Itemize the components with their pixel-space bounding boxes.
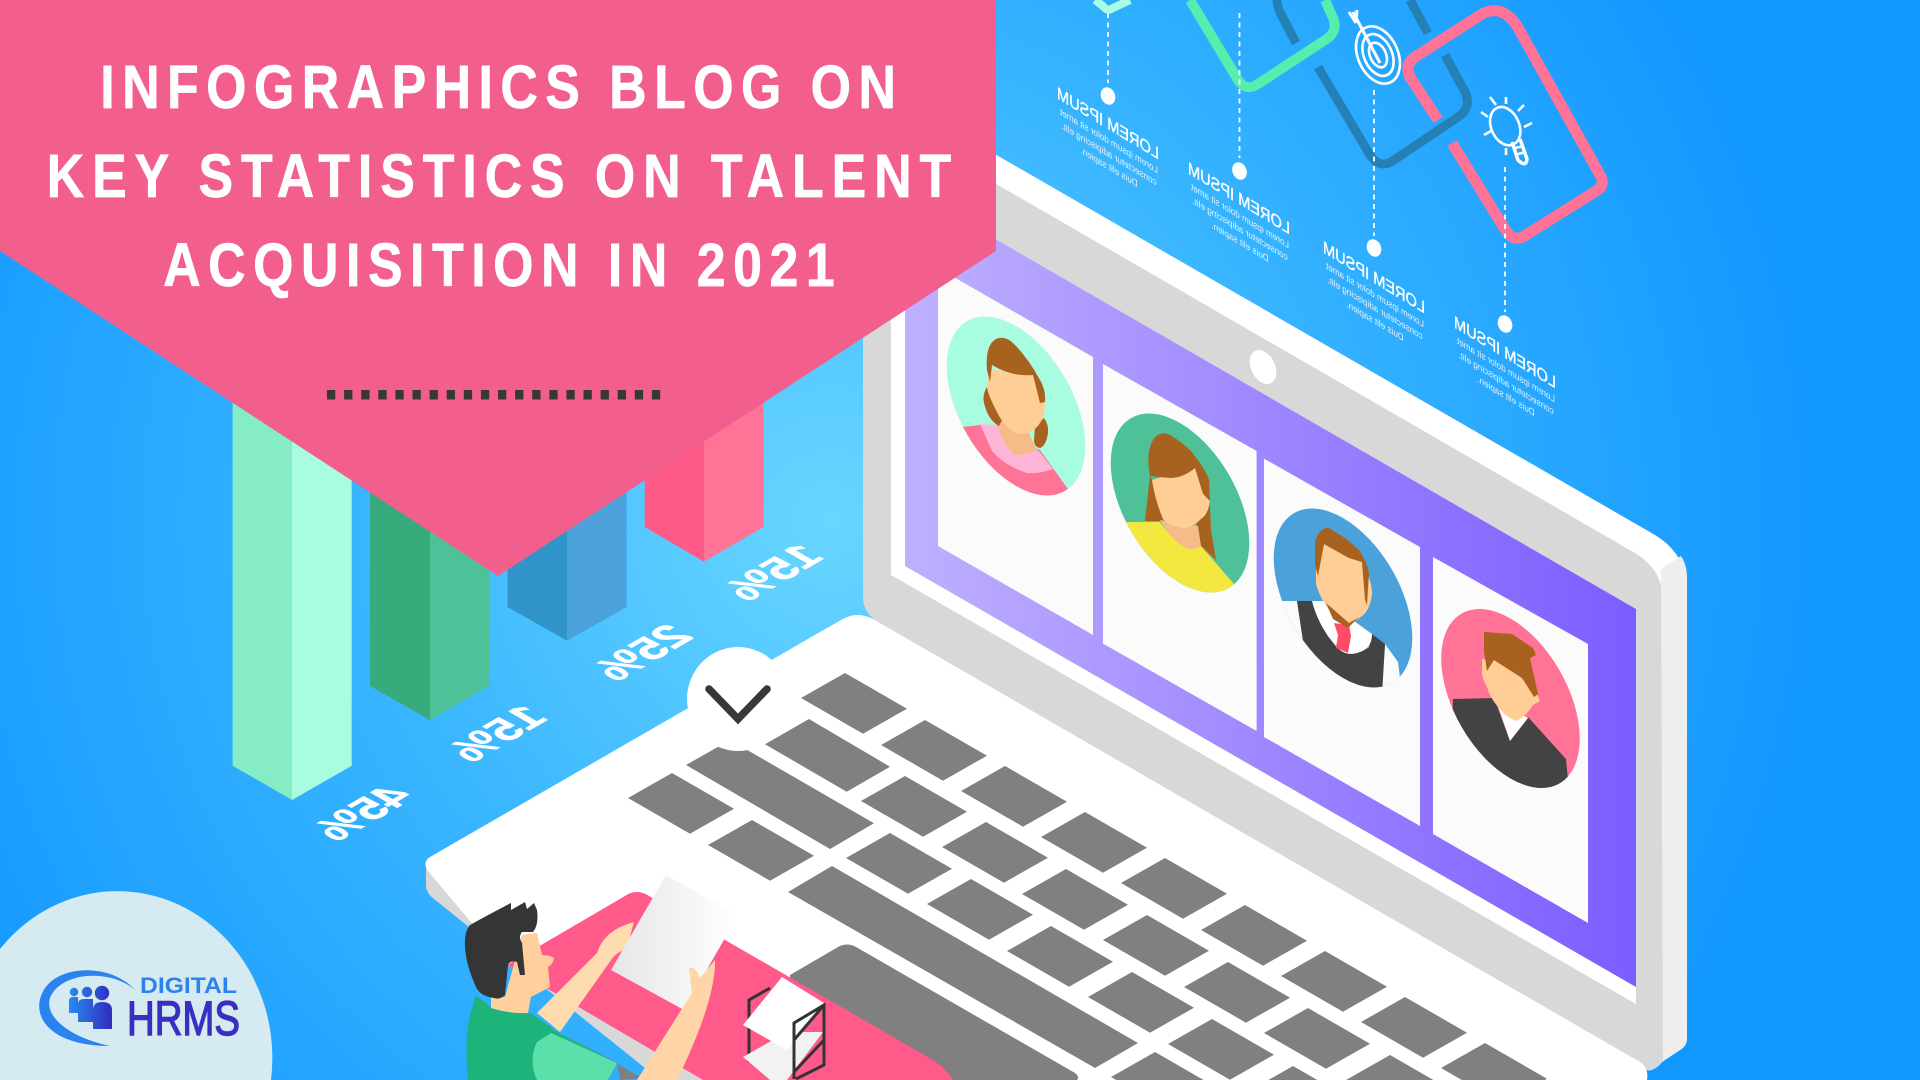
hair xyxy=(465,902,538,999)
profile card 1 xyxy=(938,278,1093,635)
text block: lorem ipsum 1: LOREM IPSUM xyxy=(1057,83,1159,164)
front arm xyxy=(637,960,715,1080)
value labels: 25% xyxy=(582,617,704,688)
face and neck xyxy=(491,933,554,1013)
text block: lorem ipsum 1: Duis elit sapien. xyxy=(1080,145,1138,190)
title: ACQUISITION IN 2021 xyxy=(163,231,835,299)
keyboard keys xyxy=(628,673,1547,1080)
laptop deck side edge xyxy=(426,868,703,1080)
value labels: 45% xyxy=(302,777,424,848)
paper xyxy=(611,875,738,1010)
bar chart xyxy=(233,330,764,800)
text block: lorem ipsum 3: consectetur adipiscing elit. xyxy=(1327,274,1423,343)
person holding paper xyxy=(465,875,738,1080)
logo: digital hrms: HRMS xyxy=(127,993,240,1046)
text block: lorem ipsum 3: Lorem ipsum dolor sit amet xyxy=(1326,260,1424,330)
text block: lorem ipsum 4: consectetur adipiscing elit. xyxy=(1458,349,1554,418)
text block: lorem ipsum 1: consectetur adipiscing elit. xyxy=(1061,120,1157,189)
pink title banner xyxy=(0,0,996,576)
laptop keyboard deck xyxy=(425,615,1647,1080)
text block: lorem ipsum 3: Duis elit sapien. xyxy=(1346,299,1404,344)
chain of four linked rounded frames xyxy=(1095,0,1602,238)
logo badge circle xyxy=(0,891,272,1080)
logo wordmark: DIGITAL xyxy=(140,973,237,998)
back arm xyxy=(537,922,643,1032)
logo people xyxy=(69,986,112,1029)
laptop lid xyxy=(863,78,1687,1070)
profile card 4 xyxy=(1433,557,1588,923)
sleeve xyxy=(532,1033,617,1080)
logo swoosh xyxy=(39,970,135,1046)
text block: lorem ipsum 2: LOREM IPSUM xyxy=(1188,158,1290,239)
icon: light bulb xyxy=(1481,97,1532,164)
value labels: 15% xyxy=(713,537,835,608)
title: KEY STATISTICS ON TALENT xyxy=(47,142,951,210)
pink mat on deck xyxy=(507,892,953,1080)
profile card 3 xyxy=(1264,459,1420,826)
webcam xyxy=(1244,346,1282,388)
bar: 25% xyxy=(508,380,626,641)
title: INFOGRAPHICS BLOG ON xyxy=(100,53,896,121)
chevron badge xyxy=(687,647,789,751)
text block: lorem ipsum 4: Duis elit sapien. xyxy=(1477,374,1535,419)
dashed connectors and dots xyxy=(1098,13,1515,335)
text block: lorem ipsum 4: Lorem ipsum dolor sit amet xyxy=(1457,335,1555,405)
profile card 2 xyxy=(1100,364,1260,731)
text block: lorem ipsum 1: Lorem ipsum dolor sit amet xyxy=(1060,106,1158,176)
text block: lorem ipsum 4: LOREM IPSUM xyxy=(1454,312,1556,393)
bar: 15% xyxy=(370,380,489,720)
logo: digital hrms xyxy=(39,970,240,1046)
small isometric box icon xyxy=(743,977,824,1080)
icon: target xyxy=(1348,10,1408,91)
value labels xyxy=(302,537,835,848)
shirt xyxy=(466,995,617,1080)
text block: lorem ipsum 2: consectetur adipiscing elit. xyxy=(1192,195,1288,264)
text block: lorem ipsum 2: Lorem ipsum dolor sit amet xyxy=(1191,181,1289,251)
value labels: 15% xyxy=(437,698,559,769)
bar: 45% xyxy=(233,330,352,800)
dotted divider xyxy=(327,390,660,400)
text block: lorem ipsum 2: Duis elit sapien. xyxy=(1211,220,1269,265)
text block: lorem ipsum 3: LOREM IPSUM xyxy=(1323,237,1425,318)
bar: 15% pink xyxy=(645,380,764,562)
title xyxy=(47,53,951,299)
